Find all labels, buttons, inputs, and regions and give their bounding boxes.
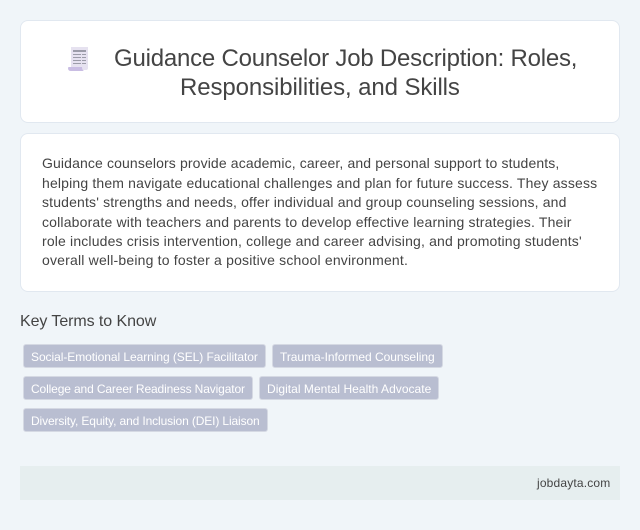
tag: DEI liaison	[23, 408, 268, 432]
tag: college and career navigator	[23, 376, 253, 400]
tag: trauma-informed counseling: Trauma-Informed Counseling	[280, 350, 435, 364]
text block: description paragraph: helping them navigate educational challenges and plan for future success. They assess	[42, 175, 597, 191]
title: Responsibilities, and Skills	[180, 74, 460, 101]
tag list	[23, 344, 443, 432]
icon: paper scroll document	[68, 47, 88, 71]
title: Guidance Counselor Job Description: Roles,	[114, 45, 577, 72]
title	[114, 45, 577, 101]
text block: description paragraph: Guidance counselors provide academic, career, and personal support to students,	[42, 155, 559, 171]
footer text: site name: jobdayta.com	[537, 476, 610, 490]
tag: SEL facilitator	[23, 344, 266, 368]
tag: trauma-informed counseling	[272, 344, 443, 368]
text block: description paragraph: role includes crisis intervention, college and career advising, and promoting students'	[42, 233, 582, 249]
tag: SEL facilitator: Social-Emotional Learning (SEL) Facilitator	[31, 350, 258, 364]
panel: description card	[20, 133, 620, 292]
tag: college and career navigator: College and Career Readiness Navigator	[31, 382, 245, 396]
text block: description paragraph: collaborate with teachers and parents to develop effective learning strategies. Their	[42, 214, 572, 230]
tag: digital mental health advocate	[259, 376, 439, 400]
heading: key terms: Key Terms to Know	[20, 313, 156, 330]
panel: title card	[20, 20, 620, 123]
text block: description paragraph: students' strengths and needs, offer individual and group counseling sessions, and	[42, 194, 567, 210]
footer bar	[20, 466, 620, 500]
tag: digital mental health advocate: Digital Mental Health Advocate	[267, 382, 431, 396]
tag: DEI liaison: Diversity, Equity, and Inclusion (DEI) Liaison	[31, 414, 260, 428]
text block: description paragraph: overall well-being to foster a positive school environment.	[42, 252, 408, 268]
text block: description paragraph	[42, 155, 597, 268]
